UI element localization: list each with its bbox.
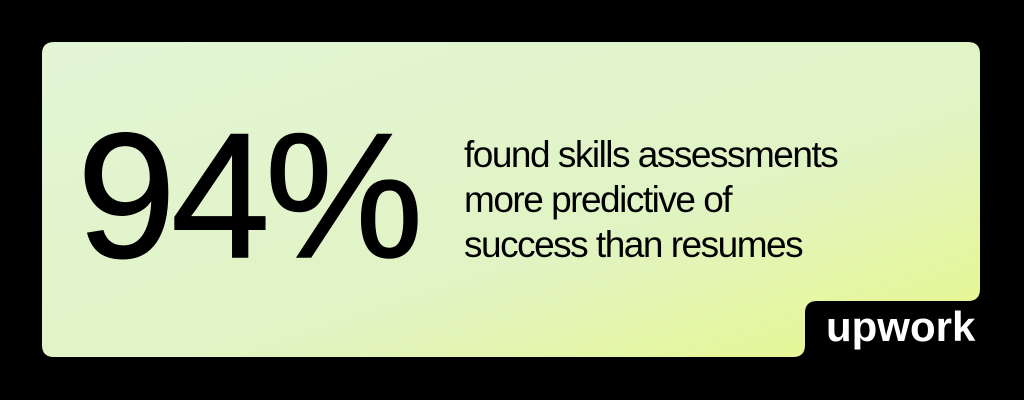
big stat: 94% (77, 96, 418, 295)
description text: success than resumes (464, 224, 802, 265)
description text: found skills assessments (464, 134, 837, 175)
description text: more predictive of (464, 179, 731, 220)
description text (464, 134, 838, 265)
logo: upwork: upwork (826, 303, 975, 350)
